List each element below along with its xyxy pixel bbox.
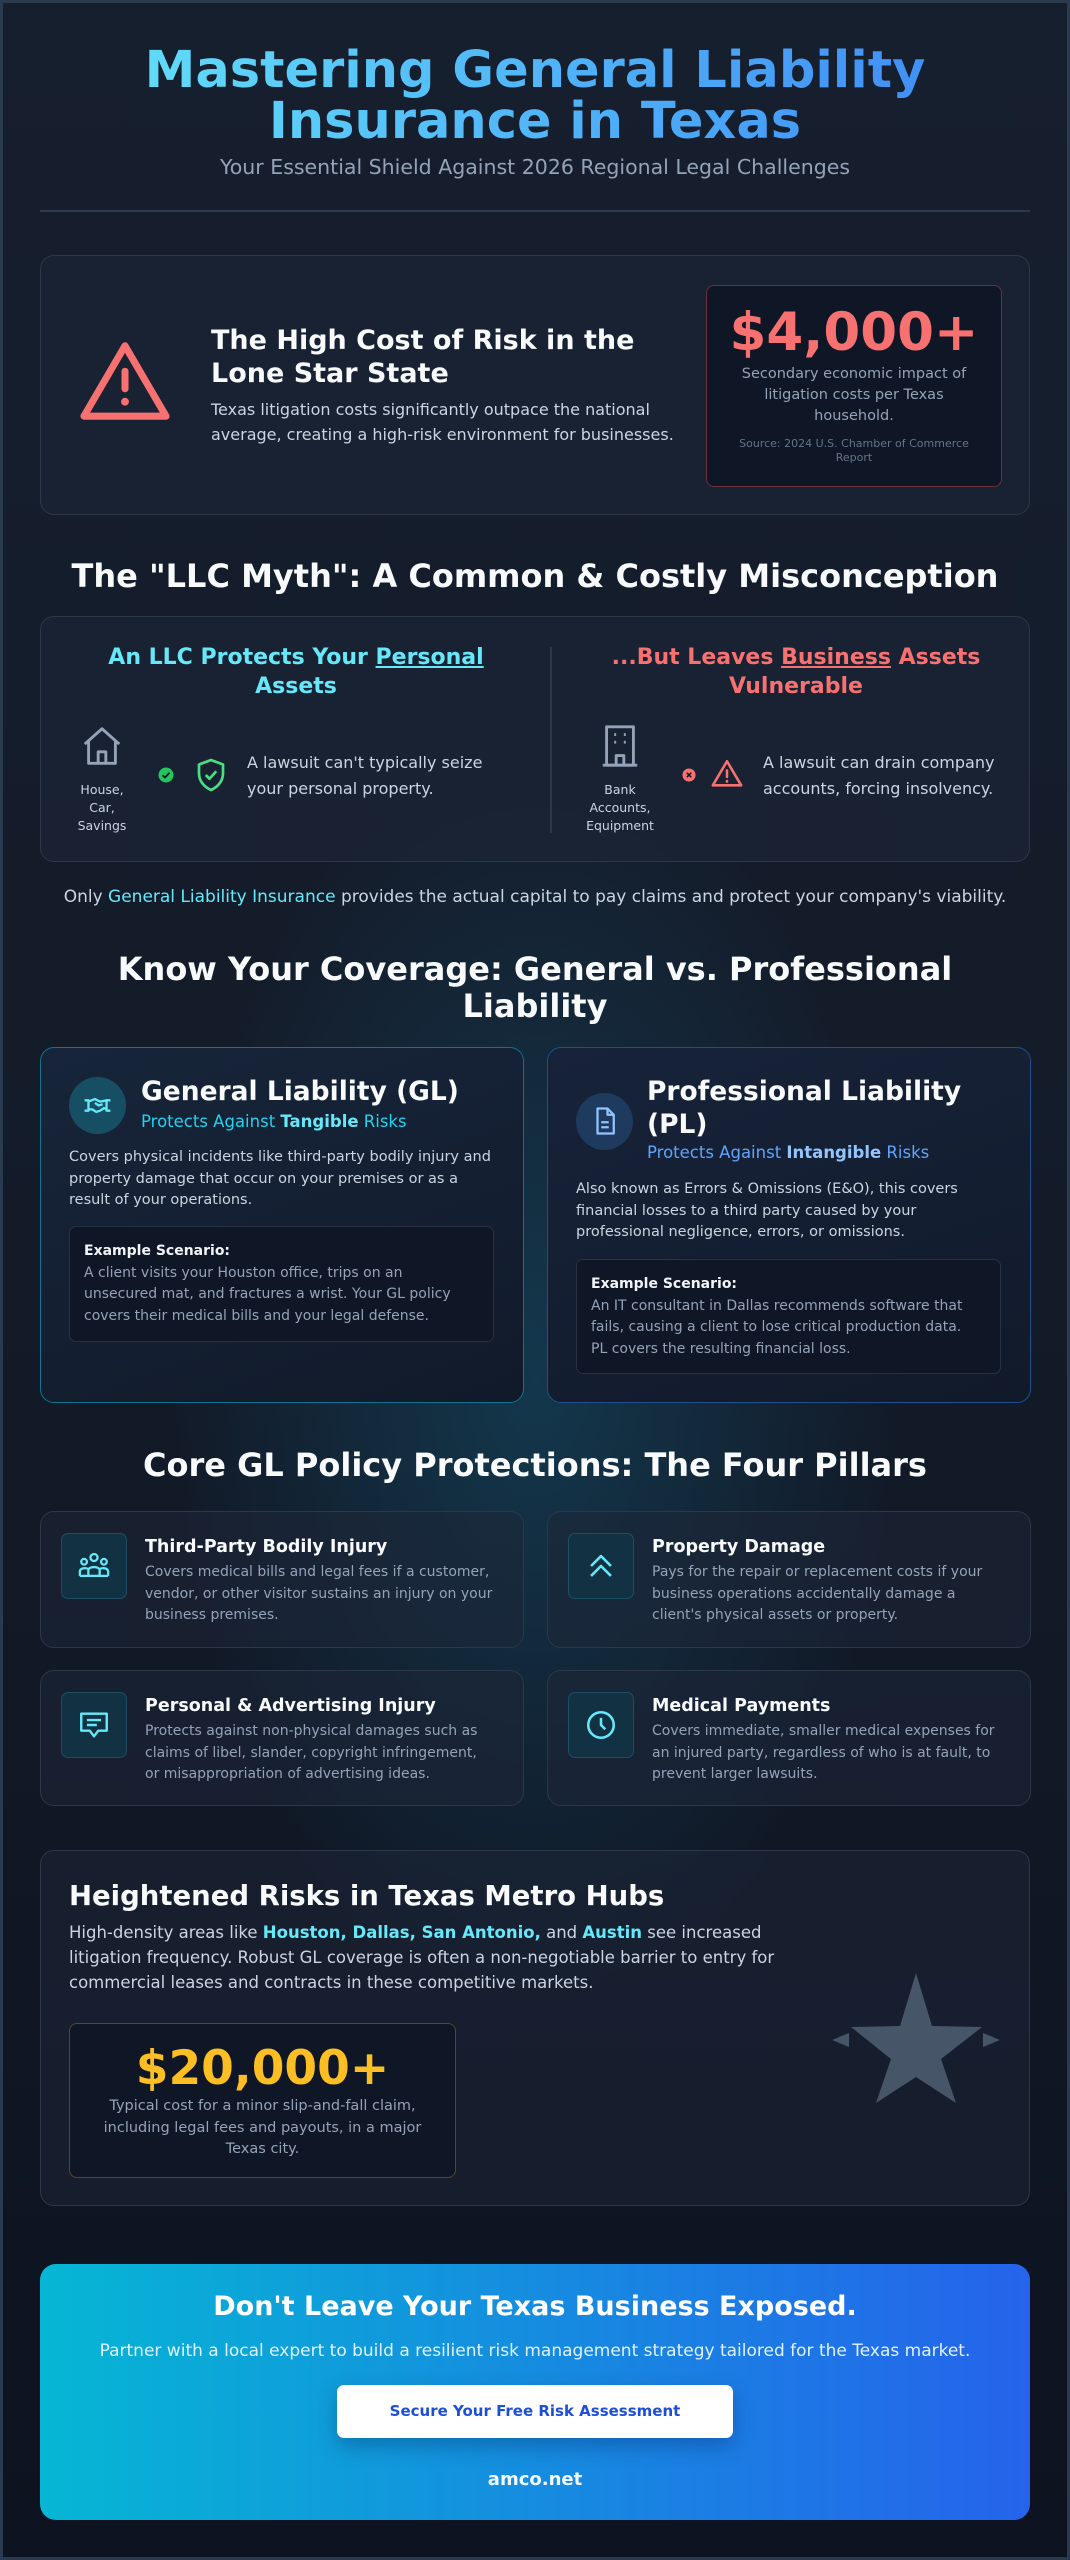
icon: handshake: [69, 1077, 126, 1134]
stat: $20,000+: [69, 2023, 456, 2178]
text: metro description: High-density areas like Houston, Dallas, San Antonio, and Austin see increased litigation frequency. Robust GL coverage is often a non-negotiable barrier to entry for commercial leases and contracts in these competitive markets.: [69, 1923, 774, 1992]
label: bank accounts equipment: Equipment: [586, 818, 654, 833]
icon: texas star: [832, 1974, 1000, 2103]
pillar: medical payments: [547, 1670, 1031, 1806]
heading: GL: General Liability (GL): [141, 1076, 459, 1107]
button: risk assessment: Secure Your Free Risk Assessment: [390, 2402, 680, 2420]
stat: $4,000+: Source: 2024 U.S. Chamber of Commerce Report: [739, 437, 969, 464]
pillar: property damage: [547, 1511, 1031, 1648]
heading: PL: Professional Liability: [647, 1076, 961, 1107]
stat: $4,000+: $4,000+: [730, 302, 978, 363]
title: [0, 45, 1070, 147]
subtitle: intangible: Protects Against Intangible Risks: [647, 1143, 929, 1162]
text: only GL insurance: Only General Liability Insurance provides the actual capital to pay claims and protect your company's viability.: [64, 887, 1006, 907]
text: GL description: Covers physical incidents like third-party bodily injury and property damage that occur on your premises or as a result of your operations.: [69, 1149, 491, 1208]
heading: business assets: Vulnerable: [729, 674, 863, 699]
heading: cta: Don't Leave Your Texas Business Exposed.: [213, 2291, 857, 2322]
button: risk assessment: [337, 2385, 733, 2438]
text: medical payments: Covers immediate, smaller medical expenses for an injured party, regardless of who is at fault, to prevent larger lawsuits.: [652, 1723, 995, 1782]
example: PL scenario: Example Scenario:: [591, 1276, 737, 1292]
icon: warning small: [712, 760, 742, 787]
icon: x mark: [682, 768, 696, 782]
text: lawsuit personal: A lawsuit can't typically seize your personal property.: [247, 753, 482, 798]
heading: PL: (PL): [647, 1109, 708, 1140]
heading: business assets: ...But Leaves Business Assets: [612, 645, 980, 670]
icon: building: [602, 725, 638, 767]
card: general liability: [40, 1047, 524, 1403]
heading: personal assets: Assets: [255, 674, 337, 699]
example: GL scenario: [69, 1226, 494, 1342]
subtitle: Your Essential Shield Against 2026 Regional Legal Challenges: [220, 155, 850, 179]
icon: document: [576, 1093, 633, 1150]
heading: medical payments: Medical Payments: [652, 1696, 830, 1716]
heading: know your coverage: [118, 950, 952, 1025]
left column: personal assets: [78, 645, 484, 833]
icon: check: [158, 768, 174, 782]
text: PL description: Also known as Errors & Omissions (E&O), this covers financial losses to a third party caused by your professional negligence, errors, or omissions.: [576, 1181, 958, 1240]
card: professional liability: [547, 1047, 1031, 1403]
example: GL scenario: Example Scenario:: [84, 1243, 230, 1259]
pillar: personal advertising injury: [40, 1670, 524, 1806]
heading: personal assets: [108, 645, 484, 699]
panel: metro hubs: [40, 1850, 1030, 2206]
title: Mastering General Liability: [145, 41, 925, 100]
label: house car savings: [78, 782, 126, 833]
heading: know your coverage: Liability: [463, 987, 607, 1025]
heading: bodily injury: Third-Party Bodily Injury: [145, 1537, 387, 1557]
heading: metro hubs: Heightened Risks in Texas Metro Hubs: [69, 1880, 664, 1912]
text: cta sub: Partner with a local expert to build a resilient risk management strategy tailored for the Texas market.: [100, 2341, 970, 2361]
stat: $4,000+: Secondary economic impact of litigation costs per Texas household.: [742, 366, 966, 424]
icon: people: [61, 1533, 127, 1599]
icon: warning: [80, 342, 170, 420]
label: bank accounts equipment: [586, 782, 654, 833]
heading: high cost: The High Cost of Risk in the: [211, 325, 634, 356]
stat: $20,000+: $20,000+: [136, 2041, 389, 2096]
right column: business assets: [586, 645, 994, 833]
title: Insurance in Texas: [269, 92, 801, 151]
text: litigation costs: Texas litigation costs significantly outpace the national average, creating a high-risk environment for businesses.: [211, 400, 674, 444]
text: personal advertising: Protects against non-physical damages such as claims of libel, slander, copyright infringement, or misappropriation of advertising ideas.: [145, 1723, 477, 1782]
heading: LLC myth: The "LLC Myth": A Common & Costly Misconception: [72, 557, 998, 595]
icon: chevrons: [568, 1533, 634, 1599]
heading: personal assets: An LLC Protects Your Personal: [108, 645, 484, 670]
heading: high cost: [211, 325, 634, 389]
example: PL scenario: [576, 1259, 1001, 1374]
heading: personal advertising: Personal & Advertising Injury: [145, 1696, 436, 1716]
label: house car savings: Car,: [89, 800, 115, 815]
example: PL scenario: An IT consultant in Dallas recommends software that fails, causing a client to lose critical production data. PL covers the resulting financial loss.: [591, 1298, 962, 1356]
pillar: bodily injury: [40, 1511, 524, 1648]
label: house car savings: Savings: [78, 818, 126, 833]
panel: LLC comparison: [40, 616, 1030, 862]
example: GL scenario: A client visits your Houston office, trips on an unsecured mat, and fractures a wrist. Your GL policy covers their medical bills and your legal defense.: [84, 1264, 451, 1324]
stat: $20,000+: Typical cost for a minor slip-and-fall claim, including legal fees and payouts, in a major Texas city.: [104, 2098, 421, 2157]
icon: clock: [568, 1692, 634, 1758]
text: website: amco.net: [488, 2469, 582, 2490]
cta banner: [40, 2264, 1030, 2520]
label: house car savings: House,: [80, 782, 124, 797]
label: bank accounts equipment: Accounts,: [590, 800, 650, 815]
heading: business assets: [612, 645, 980, 699]
text: property damage: Pays for the repair or replacement costs if your business operations accidentally damage a client's physical assets or property.: [652, 1564, 982, 1623]
icon: house: [84, 727, 120, 765]
icon: shield: [198, 758, 224, 792]
heading: property damage: Property Damage: [652, 1537, 825, 1557]
heading: high cost: Lone Star State: [211, 358, 449, 389]
panel: high cost of risk: [40, 255, 1030, 515]
subtitle: tangible: Protects Against Tangible Risks: [141, 1112, 407, 1131]
heading: know your coverage: Know Your Coverage: General vs. Professional: [118, 950, 952, 988]
icon: speech bubble: [61, 1692, 127, 1758]
label: bank accounts equipment: Bank: [604, 782, 636, 797]
stat: $4,000+: [706, 285, 1002, 487]
heading: PL: [647, 1076, 961, 1140]
heading: four pillars: Core GL Policy Protections: The Four Pillars: [143, 1446, 927, 1484]
text: bodily injury: Covers medical bills and legal fees if a customer, vendor, or other visitor sustains an injury on your business premises.: [145, 1564, 492, 1623]
text: lawsuit business: A lawsuit can drain company accounts, forcing insolvency.: [763, 753, 994, 798]
